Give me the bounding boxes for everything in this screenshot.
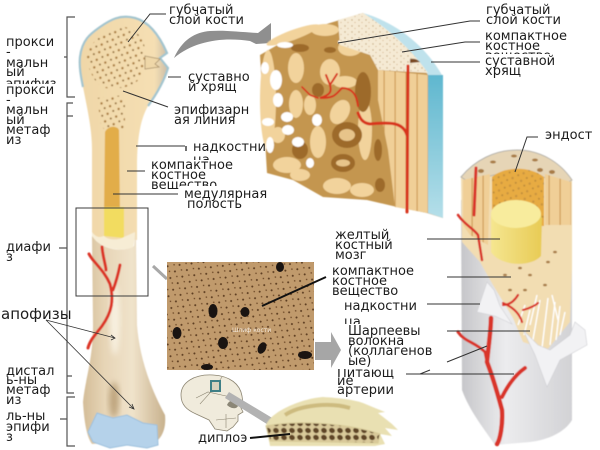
distal articular cartilage (88, 413, 158, 448)
compact columns (463, 174, 571, 245)
label: articular cartilage (block): хрящ (485, 64, 521, 79)
label: spongy bone (block) (486, 3, 561, 28)
label: Sharpey fibres: (коллагенов (348, 344, 432, 359)
label: proximal epiphysis: - (6, 45, 11, 60)
label: spongy bone (femur) (169, 3, 244, 28)
label: articular cartilage (femur) (188, 70, 250, 95)
compact bone micrograph (167, 262, 314, 370)
label: proximal epiphysis: эпифиз (6, 77, 57, 92)
label: epiphyseal line: ая линия (174, 113, 235, 128)
label: spongy bone (block): слой кости (486, 13, 561, 28)
label: medullary cavity: медулярная (184, 187, 267, 202)
label: proximal metaphysis: ый (6, 113, 25, 128)
label: diaphysis: диафи (6, 240, 51, 255)
label: articular cartilage (femur): й хрящ (188, 80, 237, 95)
white voids (261, 39, 352, 168)
label: distal epiphysis: з (6, 430, 13, 445)
gray arrow from box to micrograph (153, 266, 167, 279)
arrows from apophyses label (46, 320, 134, 409)
gray bar to skull bone section (225, 392, 274, 426)
label: distal epiphysis: эпифи (6, 420, 50, 435)
label: endosteum: эндост (545, 128, 593, 143)
label: Sharpey fibres: Шарпеевы (348, 324, 421, 339)
label: proximal metaphysis: прокси (6, 83, 54, 98)
pointer: compact bone on micrograph (262, 277, 326, 306)
compact columns (378, 70, 428, 213)
label: medullary cavity: полость (187, 197, 242, 212)
diploe layer (266, 423, 380, 443)
label: Sharpey fibres (348, 324, 432, 369)
label: diaphysis (6, 240, 51, 265)
label: periosteum (section) (345, 302, 416, 324)
cut surface (92, 232, 135, 250)
label: diaphysis: з (6, 250, 13, 265)
label: compact bone (section): компактное (332, 264, 414, 279)
blood vessels (302, 66, 408, 212)
periosteum outer surface (461, 200, 572, 445)
label: compact bone (block): вещество (485, 49, 551, 64)
pointer: diploe (250, 434, 290, 438)
label: compact bone (block) (486, 32, 566, 54)
label: compact bone (femur): компактное (151, 158, 233, 173)
label: distal metaphysis: ь-ны (6, 373, 37, 388)
lower shaft shading (83, 232, 165, 444)
label: periosteum (section): ца (344, 315, 361, 330)
label: compact bone (section) (332, 264, 414, 299)
label: yellow marrow: костный (335, 238, 393, 253)
compact bone mottled top (338, 13, 428, 73)
block base (260, 13, 443, 218)
label: distal metaphysis (6, 364, 54, 408)
label: Sharpey fibres: волокна (348, 334, 404, 349)
label: epiphyseal line: эпифизарн (174, 103, 249, 118)
label: periosteum (femur): ца (193, 153, 210, 168)
label: periosteum (femur): надкостни (193, 140, 266, 155)
label: compact bone (femur): костное (151, 168, 206, 183)
label: proximal epiphysis: ый (6, 65, 25, 80)
yellow marrow cylinder (491, 200, 542, 264)
label: proximal metaphysis: метаф (6, 123, 50, 138)
label: compact bone (femur) (152, 162, 232, 189)
label: compact bone (section): костное (332, 274, 387, 289)
box marking the magnified region (76, 208, 148, 296)
condyle groove (109, 382, 119, 418)
label: proximal epiphysis: мальн (6, 56, 48, 71)
cavity lights (336, 129, 355, 166)
label: apophyses: апофизы (1, 305, 72, 323)
pale trabeculae (260, 21, 374, 197)
label: medullary cavity (180, 186, 270, 212)
label: articular cartilage (block): суставной (485, 54, 555, 69)
label: nutrient arteries: артерии (337, 383, 394, 398)
dark cavities (291, 44, 385, 192)
label: periosteum (femur) (194, 144, 265, 160)
label: diploe: диплоэ (198, 431, 247, 446)
arteries (458, 168, 538, 444)
label: proximal metaphysis: - (6, 93, 11, 108)
periosteum right flap (523, 322, 587, 387)
label: compact bone (block): костное (485, 39, 540, 54)
epiphyseal notch (145, 56, 160, 69)
watermark caption: Шлиф кости (232, 327, 271, 334)
endosteum texture (492, 169, 544, 226)
label: spongy bone (block): губчатый (486, 3, 550, 18)
Sharpey fibres (518, 295, 565, 348)
label: yellow marrow (335, 228, 393, 263)
label: spongy bone (femur): губчатый (169, 3, 233, 18)
label: nutrient arteries: ие (337, 374, 353, 389)
label: proximal metaphysis: мальн (6, 103, 48, 118)
blue cartilage cap (363, 13, 442, 75)
gray block arrow (315, 332, 341, 368)
label: Sharpey fibres: ые) (348, 354, 371, 369)
cartilage outline on the head (80, 17, 168, 106)
brackets for bone regions (59, 17, 75, 446)
upper shaft and proximal head (80, 17, 168, 240)
teal selection square (211, 381, 220, 391)
label: distal metaphysis: дистал (6, 364, 54, 379)
skull (181, 375, 243, 431)
yellow marrow plug (104, 207, 124, 238)
label: nutrient arteries (338, 369, 394, 397)
spongy bone block detail (260, 13, 443, 218)
label: epiphyseal line (174, 103, 249, 128)
spongy dots (86, 27, 146, 135)
osteon canals (172, 262, 312, 370)
label: proximal epiphysis (6, 38, 56, 84)
periosteum left flap (477, 282, 512, 324)
label: articular cartilage (femur): суставно (188, 70, 250, 85)
label: distal epiphysis (6, 409, 50, 445)
label: proximal metaphysis: из (6, 133, 21, 148)
label: proximal epiphysis: прокси (6, 35, 54, 50)
osteon holes (478, 154, 557, 291)
label: proximal metaphysis (6, 83, 54, 148)
pointer lines (113, 14, 538, 374)
long bone illustration (80, 17, 168, 448)
label: distal metaphysis: метаф (6, 383, 50, 398)
label: compact bone (block): компактное (485, 29, 567, 44)
skull bone section with diploe (266, 397, 398, 446)
endosteum spongy lining (492, 169, 544, 226)
label: yellow marrow: мозг (335, 248, 367, 263)
curved arrow to the spongy bone detail (174, 23, 271, 58)
label: compact bone (femur): вещество (151, 178, 217, 193)
label: distal epiphysis: ль-ны (6, 409, 45, 424)
compact bone cut (461, 150, 572, 350)
label: distal metaphysis: из (6, 393, 21, 408)
label: articular cartilage (block) (485, 54, 555, 79)
nutrient artery (88, 247, 120, 348)
label: spongy bone (femur): слой кости (169, 13, 244, 28)
right bone cross-section (458, 150, 587, 445)
label: periosteum (section): надкостни (344, 299, 417, 314)
label: yellow marrow: желтый (335, 228, 389, 243)
blue cartilage side (428, 75, 443, 218)
label: nutrient arteries: Питающ (337, 366, 394, 381)
highlight (110, 285, 120, 355)
top surface rim (461, 150, 572, 186)
medullary cavity (104, 127, 120, 215)
label: compact bone (section): вещество (332, 284, 398, 299)
